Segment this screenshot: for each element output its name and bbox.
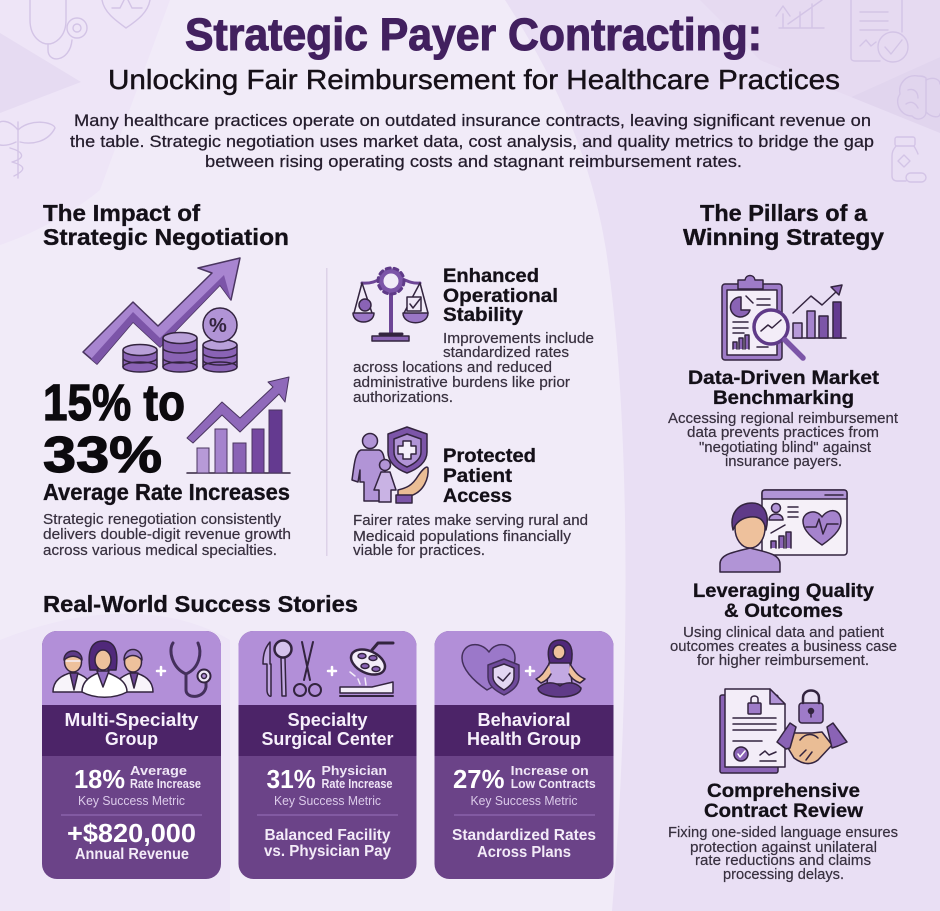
text block: access description: Medicaid populations financially: [353, 528, 572, 545]
metric: 27% increase on low contracts: [453, 763, 596, 808]
icon: background document: [851, 0, 908, 62]
icon: background pill bottle: [892, 137, 926, 182]
stat label: Average Rate Increases: [43, 479, 290, 505]
text: balanced pay: [264, 827, 391, 860]
text block: benchmarking description: insurance payers.: [725, 453, 842, 470]
heading: impact: [43, 200, 289, 250]
metric: 18% average rate increase: Rate Increase: [130, 776, 201, 791]
icon: heart, shield and meditating person: [462, 640, 585, 697]
heading: protected patient access: [443, 445, 536, 507]
text: standardized rates: [452, 827, 596, 861]
intro text block: between rising operating costs and stagnant reimbursement rates.: [205, 152, 742, 171]
metric: 31% physician rate increase: 31%: [266, 764, 316, 794]
stat: 15% to 33%: [43, 374, 185, 483]
panel: specialty surgical center card: [238, 631, 416, 879]
panel: behavioral health group card: [434, 631, 614, 879]
metric: 31% physician rate increase: [266, 763, 392, 808]
heading: pillars: The Pillars of a: [700, 200, 867, 226]
text block: quality description: outcomes creates a business case: [670, 638, 897, 655]
icon: bar chart with arrow: [187, 377, 290, 473]
card title: [262, 710, 394, 749]
text block: impact description: across various medical specialties.: [43, 542, 277, 559]
panel: enhanced operational stability: [353, 265, 594, 406]
text: balanced pay: Balanced Facility: [264, 827, 391, 844]
heading: protected patient access: Patient: [443, 465, 513, 487]
heading: enhanced operational stability: Stability: [443, 304, 523, 326]
icon: background caduceus: [0, 121, 55, 178]
heading: protected patient access: Access: [443, 485, 512, 507]
icon: scales with gear: [353, 268, 428, 341]
icon: background brain: [898, 76, 940, 119]
text block: contract description: [668, 824, 898, 883]
icon: contract, lock and handshake: [720, 689, 847, 773]
icon: plus sign: [157, 667, 165, 675]
text block: stability description: across locations and reduced: [353, 359, 552, 376]
subtitle: Unlocking Fair Reimbursement for Healthcare Practices: [108, 64, 840, 95]
intro text block: the table. Strategic negotiation uses market data, cost analysis, and quality metrics to bridge the gap: [70, 132, 874, 151]
metric: 27% increase on low contracts: 27%: [453, 764, 504, 794]
metric: 31% physician rate increase: Rate Increase: [322, 776, 392, 791]
heading: pillars: [683, 200, 884, 250]
text block: quality description: [670, 624, 897, 669]
text block: access description: Fairer rates make serving rural and: [353, 512, 588, 529]
card title: Group: [105, 729, 158, 749]
icon: background stethoscope: [30, 0, 87, 59]
metric: 18% average rate increase: [74, 763, 201, 808]
metric: 18% average rate increase: 18%: [74, 764, 125, 794]
heading: comprehensive contract review: Comprehensive: [707, 780, 860, 802]
metric: 18% average rate increase: Average: [130, 763, 187, 778]
icon: plus sign: [526, 667, 534, 675]
text block: contract description: Fixing one-sided language ensures: [668, 824, 898, 841]
metric: annual revenue: +$820,000: [67, 818, 196, 848]
text block: impact description: delivers double-digit revenue growth: [43, 526, 291, 543]
metric: 27% increase on low contracts: Key Success Metric: [470, 793, 578, 808]
icon: person with health dashboard: [720, 490, 847, 572]
text block: stability description: authorizations.: [353, 389, 453, 406]
heading: protected patient access: Protected: [443, 445, 536, 467]
metric: 31% physician rate increase: Physician: [322, 763, 387, 778]
heading: enhanced operational stability: Enhanced: [443, 265, 539, 287]
heading: comprehensive contract review: Contract Review: [704, 800, 864, 822]
icon: background heart: [102, 0, 150, 28]
text block: quality description: for higher reimbursement.: [697, 652, 869, 669]
heading: impact: The Impact of: [43, 200, 200, 226]
title: Strategic Payer Contracting:: [185, 9, 762, 60]
heading: comprehensive contract review: [704, 780, 864, 822]
icon: background chart: [776, 0, 824, 28]
text block: benchmarking description: data prevents practices from: [687, 424, 879, 441]
text: standardized rates: Standardized Rates: [452, 827, 596, 844]
card title: [467, 710, 581, 749]
text: standardized rates: Across Plans: [477, 844, 571, 861]
text block: impact description: Strategic renegotiation consistently: [43, 511, 282, 528]
intro text block: Many healthcare practices operate on outdated insurance contracts, leaving significant revenue on: [74, 111, 871, 130]
icon: surgical tools and lamp: [263, 640, 393, 696]
heading: data-driven market benchmarking: Benchmarking: [713, 387, 854, 409]
icon: growth arrow with coins: [83, 258, 240, 372]
heading: leveraging quality: Leveraging Quality: [693, 580, 874, 602]
card title: Behavioral: [478, 710, 570, 730]
panel: pillars of a winning strategy: [668, 200, 899, 883]
icon: growth arrow with coins: %: [209, 315, 227, 337]
panel: protected patient access: [352, 427, 588, 559]
icon: doctors and stethoscope: [53, 641, 210, 697]
card title: Health Group: [467, 729, 581, 749]
panel: multi-specialty group card: [42, 631, 221, 879]
text block: stability description: administrative burdens like prior: [353, 374, 570, 391]
text block: benchmarking description: Accessing regional reimbursement: [668, 410, 899, 427]
icon: plus sign: [328, 667, 336, 675]
metric: annual revenue: [67, 818, 196, 863]
text block: contract description: processing delays.: [723, 866, 844, 883]
heading: data-driven market benchmarking: Data-Driven Market: [688, 367, 880, 389]
text block: benchmarking description: "negotiating blind" against: [699, 439, 872, 456]
icon: clipboard, magnifier and chart: [722, 276, 846, 360]
text block: impact description: [43, 511, 291, 559]
text block: contract description: protection against unilateral: [690, 839, 877, 856]
stat: 15% to 33%: 15% to: [43, 374, 185, 431]
heading: leveraging quality: [693, 580, 874, 622]
card title: Multi-Specialty: [64, 710, 198, 730]
card title: [64, 710, 198, 749]
metric: 27% increase on low contracts: Low Contracts: [511, 776, 596, 791]
text block: access description: [353, 512, 588, 559]
text: balanced pay: vs. Physician Pay: [264, 843, 391, 860]
heading: leveraging quality: & Outcomes: [724, 600, 843, 622]
stat: 15% to 33%: 33%: [43, 426, 162, 483]
card title: Surgical Center: [262, 729, 394, 749]
metric: 31% physician rate increase: Key Success Metric: [274, 793, 381, 808]
panel: impact of strategic negotiation: [43, 200, 291, 559]
text block: access description: viable for practices.: [353, 542, 485, 559]
heading: pillars: Winning Strategy: [683, 224, 884, 250]
text block: contract description: rate reductions and claims: [695, 852, 871, 869]
heading: enhanced operational stability: [443, 265, 558, 326]
text block: benchmarking description: [668, 410, 899, 470]
text block: stability description: [353, 330, 594, 406]
heading: data-driven market benchmarking: [688, 367, 880, 409]
intro text block: [70, 111, 874, 171]
icon: family, shield and hand: [352, 427, 428, 503]
text block: quality description: Using clinical data and patient: [683, 624, 885, 641]
text block: stability description: standardized rates: [443, 344, 569, 361]
metric: 18% average rate increase: Key Success Metric: [78, 793, 185, 808]
card title: Specialty: [288, 710, 368, 730]
heading: real-world success stories: Real-World Success Stories: [43, 591, 358, 617]
metric: annual revenue: Annual Revenue: [75, 846, 189, 863]
heading: enhanced operational stability: Operational: [443, 285, 558, 307]
text block: stability description: Improvements include: [443, 330, 594, 347]
metric: 27% increase on low contracts: Increase on: [511, 763, 589, 778]
heading: impact: Strategic Negotiation: [43, 224, 289, 250]
